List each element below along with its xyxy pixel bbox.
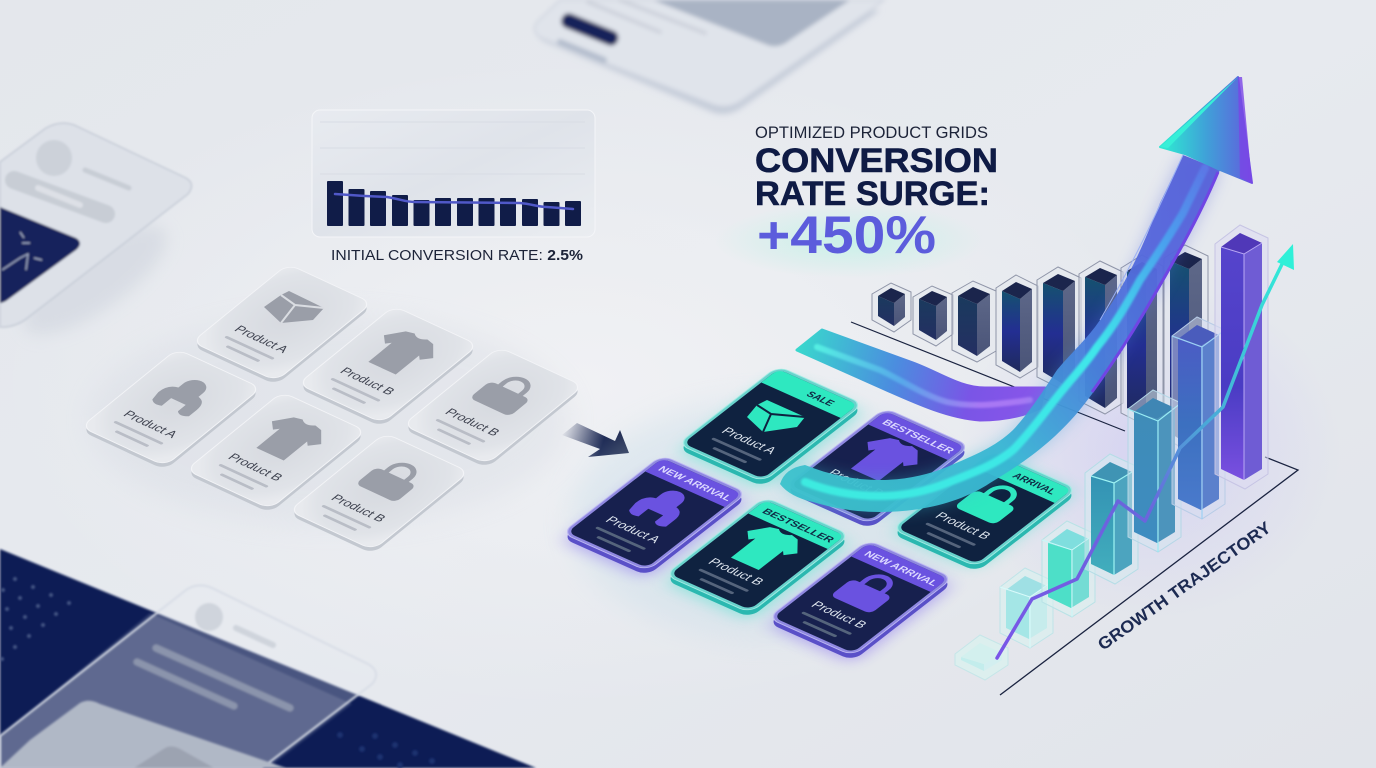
card: new arrival product A [562, 455, 747, 579]
growth bar 1 [955, 635, 1008, 680]
card: bestseller shirt purple [785, 408, 970, 529]
growth bar 3 [1042, 521, 1095, 617]
axis: back chart baseline [851, 322, 1125, 431]
card: product B lock [403, 347, 583, 468]
card: product B shirt [298, 306, 478, 427]
card grid: plain product cards [81, 264, 583, 554]
card: product B lock lower [289, 433, 469, 554]
card: new arrival lock purple [768, 540, 953, 664]
card: new arrival product A: Product A [602, 514, 665, 546]
card grid: optimized product cards [562, 366, 1077, 664]
card: product A lock [81, 349, 261, 470]
card: product B shirt lower [186, 392, 366, 513]
growth bar 6 [1172, 317, 1225, 519]
card: arrival lock teal: ARRIVAL [1009, 472, 1058, 497]
card: arrival lock teal [892, 451, 1077, 572]
growth bar 2 [1000, 568, 1053, 648]
key figure: +450% [757, 206, 936, 265]
blurred panel: top device card [534, 0, 884, 114]
card: product A lock: Product A [120, 408, 181, 440]
card: arrival lock teal: Product B [932, 510, 995, 542]
growth bar 7 [1215, 225, 1268, 489]
heading: conversion rate surge [715, 123, 998, 278]
card: bestseller shirt purple: Product B [825, 467, 888, 499]
card: product B lock: Product B [442, 406, 503, 438]
card: bestseller shirt purple: BESTSELLER [879, 418, 957, 456]
card: bestseller shirt teal [665, 497, 850, 621]
axis label: growth trajectory: GROWTH TRAJECTORY [1094, 518, 1275, 654]
dark bar 3 [952, 281, 996, 362]
caption: initial conversion rate: INITIAL CONVERSION RATE: 2.5% [331, 247, 583, 264]
chart trend line [335, 194, 573, 209]
chart: back dark bars [872, 245, 1208, 452]
arrowhead [1160, 77, 1252, 183]
headline line two: RATE SURGE: [755, 175, 990, 213]
chart bars [327, 181, 581, 226]
line chart: growth trend with arrow [997, 244, 1294, 658]
panel: initial conversion bar chart [312, 110, 595, 237]
arrow: back ribbon section [797, 330, 1045, 420]
dark bar 7 [1121, 255, 1163, 426]
dark bar 1 [872, 283, 911, 332]
dark bar 8 [1164, 245, 1208, 452]
growth bar 5 [1128, 390, 1181, 552]
headline line one: CONVERSION [755, 142, 998, 180]
card: product B shirt lower: Product B [225, 451, 286, 483]
card: sale product A [678, 366, 863, 490]
dark bar 6 [1079, 261, 1123, 414]
card: product A box [192, 264, 372, 385]
card: sale product A: Product A [718, 425, 781, 457]
dark bar 5 [1037, 267, 1081, 390]
card: sale product A: SALE [803, 390, 837, 408]
card: product A box: Product A [231, 323, 292, 355]
dark bar 4 [996, 275, 1038, 378]
card: bestseller shirt teal: BESTSELLER [759, 507, 837, 545]
eyebrow: OPTIMIZED PRODUCT GRIDS [755, 123, 988, 142]
card: new arrival lock purple: NEW ARRIVAL [861, 550, 940, 588]
card: product B lock lower: Product B [328, 492, 389, 524]
axis: front chart floor [1000, 457, 1298, 695]
card: new arrival product A: NEW ARRIVAL [655, 465, 734, 503]
chart: front growth bars [955, 225, 1268, 680]
dark bar 2 [913, 286, 953, 346]
growth bar 4 [1085, 454, 1138, 584]
blurred panel: bottom left navy sheet with glass card [0, 549, 536, 768]
card: product B shirt: Product B [337, 365, 398, 397]
arrow: main growth ribbon [780, 77, 1252, 512]
arrow: plain grid to optimized grid [562, 423, 629, 457]
card: bestseller shirt teal: Product B [705, 556, 768, 588]
card: new arrival lock purple: Product B [808, 599, 871, 631]
blurred panel: left glass card [0, 123, 192, 353]
